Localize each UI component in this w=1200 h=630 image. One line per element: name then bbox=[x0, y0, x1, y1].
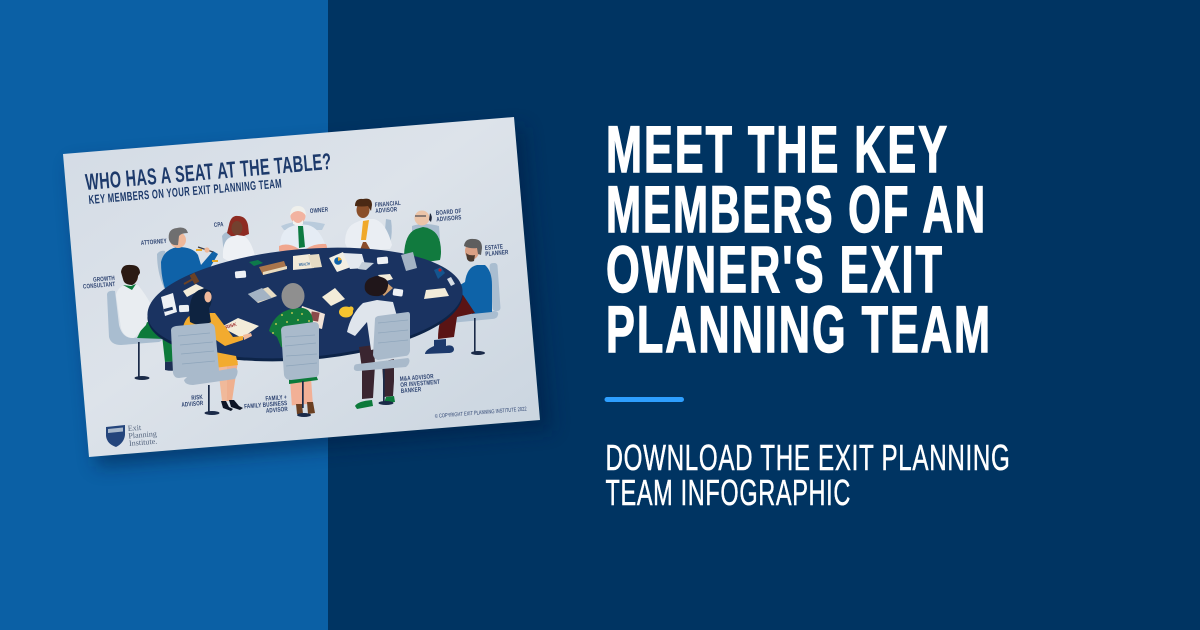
table rim bbox=[143, 239, 467, 373]
headline line 1: MEET THE KEY bbox=[606, 112, 949, 186]
person: family and family business advisor bbox=[269, 283, 319, 417]
growth chart sheet bbox=[161, 293, 177, 316]
risk documents bbox=[221, 318, 259, 338]
book bbox=[259, 261, 287, 275]
attorney papers bbox=[183, 284, 204, 297]
label: M&A advisor or investment banker: BANKER bbox=[401, 387, 422, 395]
table top bbox=[143, 236, 467, 370]
clipboard bbox=[401, 252, 417, 271]
label: growth consultant: CONSULTANT bbox=[83, 281, 116, 291]
label: family and family business advisor: ADVISOR bbox=[266, 406, 288, 415]
family photo album bbox=[300, 306, 325, 329]
card title: WHO HAS A SEAT AT THE TABLE? bbox=[84, 148, 333, 195]
label: risk advisor: ADVISOR bbox=[181, 400, 204, 409]
label: CPA: CPA bbox=[214, 222, 224, 229]
headline line 2: MEMBERS OF AN bbox=[606, 172, 987, 246]
label: M&A advisor or investment banker: OR INVESTMENT bbox=[400, 379, 441, 389]
copyright note: © COPYRIGHT EXIT PLANNING INSTITUTE 2022 bbox=[435, 405, 527, 420]
headline line 4: PLANNING TEAM bbox=[606, 292, 992, 366]
coffee cup left bbox=[235, 270, 246, 278]
pie chart report bbox=[329, 252, 351, 272]
label: risk advisor: RISK bbox=[191, 394, 203, 402]
label: estate planner: PLANNER bbox=[485, 250, 509, 258]
coffee cup low left bbox=[179, 305, 189, 312]
person: M&A advisor bbox=[347, 276, 410, 409]
card sheet bbox=[63, 117, 540, 457]
coffee cup right bbox=[392, 288, 403, 297]
logo: Exit Planning Institute bbox=[106, 422, 158, 448]
label: financial advisor: FINANCIAL bbox=[375, 200, 402, 209]
person: risk advisor bbox=[171, 289, 252, 415]
logo wordmark: Planning bbox=[128, 429, 157, 440]
label: family and family business advisor: FAMILY + bbox=[265, 394, 288, 403]
label: financial advisor: ADVISOR bbox=[375, 207, 398, 215]
card subtitle: KEY MEMBERS ON YOUR EXIT PLANNING TEAM bbox=[88, 176, 283, 207]
accent divider bbox=[604, 397, 684, 402]
left background panel bbox=[0, 0, 328, 630]
person: attorney bbox=[161, 228, 218, 306]
logo wordmark: Exit bbox=[127, 423, 142, 433]
model building bbox=[434, 267, 445, 279]
label: owner: OWNER bbox=[310, 207, 328, 215]
card shadow bbox=[71, 127, 552, 467]
label: attorney: ATTORNEY bbox=[141, 238, 167, 247]
paper right bbox=[424, 288, 449, 299]
subheading line 2: TEAM INFOGRAPHIC bbox=[606, 472, 851, 513]
person: owner bbox=[279, 206, 327, 256]
person: board of advisors bbox=[404, 210, 441, 264]
logo shield bbox=[106, 425, 125, 447]
label: growth consultant: GROWTH bbox=[93, 275, 115, 284]
infographic card bbox=[63, 117, 540, 457]
laptop bbox=[343, 253, 366, 269]
person: financial advisor bbox=[345, 199, 392, 252]
coffee cup top bbox=[377, 256, 388, 264]
subheading line 1: DOWNLOAD THE EXIT PLANNING bbox=[606, 437, 1010, 478]
label: M&A advisor or investment banker: M&A ADVISOR bbox=[400, 374, 434, 383]
person: growth consultant bbox=[107, 265, 181, 380]
phone in hand bbox=[447, 277, 455, 286]
back-row chairs bbox=[157, 219, 440, 288]
conference table bbox=[143, 236, 467, 373]
role labels bbox=[82, 200, 509, 417]
table items: RISK bbox=[225, 321, 238, 331]
owner documents bbox=[293, 254, 314, 270]
green calculator bbox=[249, 260, 263, 266]
gavel bbox=[184, 274, 198, 284]
download subheading bbox=[606, 437, 1010, 513]
tilted paper bbox=[322, 288, 345, 306]
label: board of advisors: ADVISORS bbox=[436, 215, 462, 224]
grey folder bbox=[248, 287, 277, 303]
wealth label: WEALTH bbox=[299, 261, 310, 267]
person: estate planner bbox=[425, 239, 501, 355]
right background panel bbox=[328, 0, 1200, 630]
envelope bbox=[370, 280, 393, 296]
headline line 3: OWNER'S EXIT bbox=[606, 232, 944, 306]
logo wordmark: Institute. bbox=[129, 437, 158, 448]
label: family and family business advisor: FAMILY BUSINESS bbox=[244, 400, 288, 411]
label: estate planner: ESTATE bbox=[485, 244, 504, 252]
person: CPA bbox=[223, 216, 255, 265]
label: board of advisors: BOARD OF bbox=[436, 208, 462, 217]
piggy bank bbox=[339, 306, 354, 318]
table items bbox=[161, 252, 455, 338]
headline bbox=[606, 112, 992, 366]
